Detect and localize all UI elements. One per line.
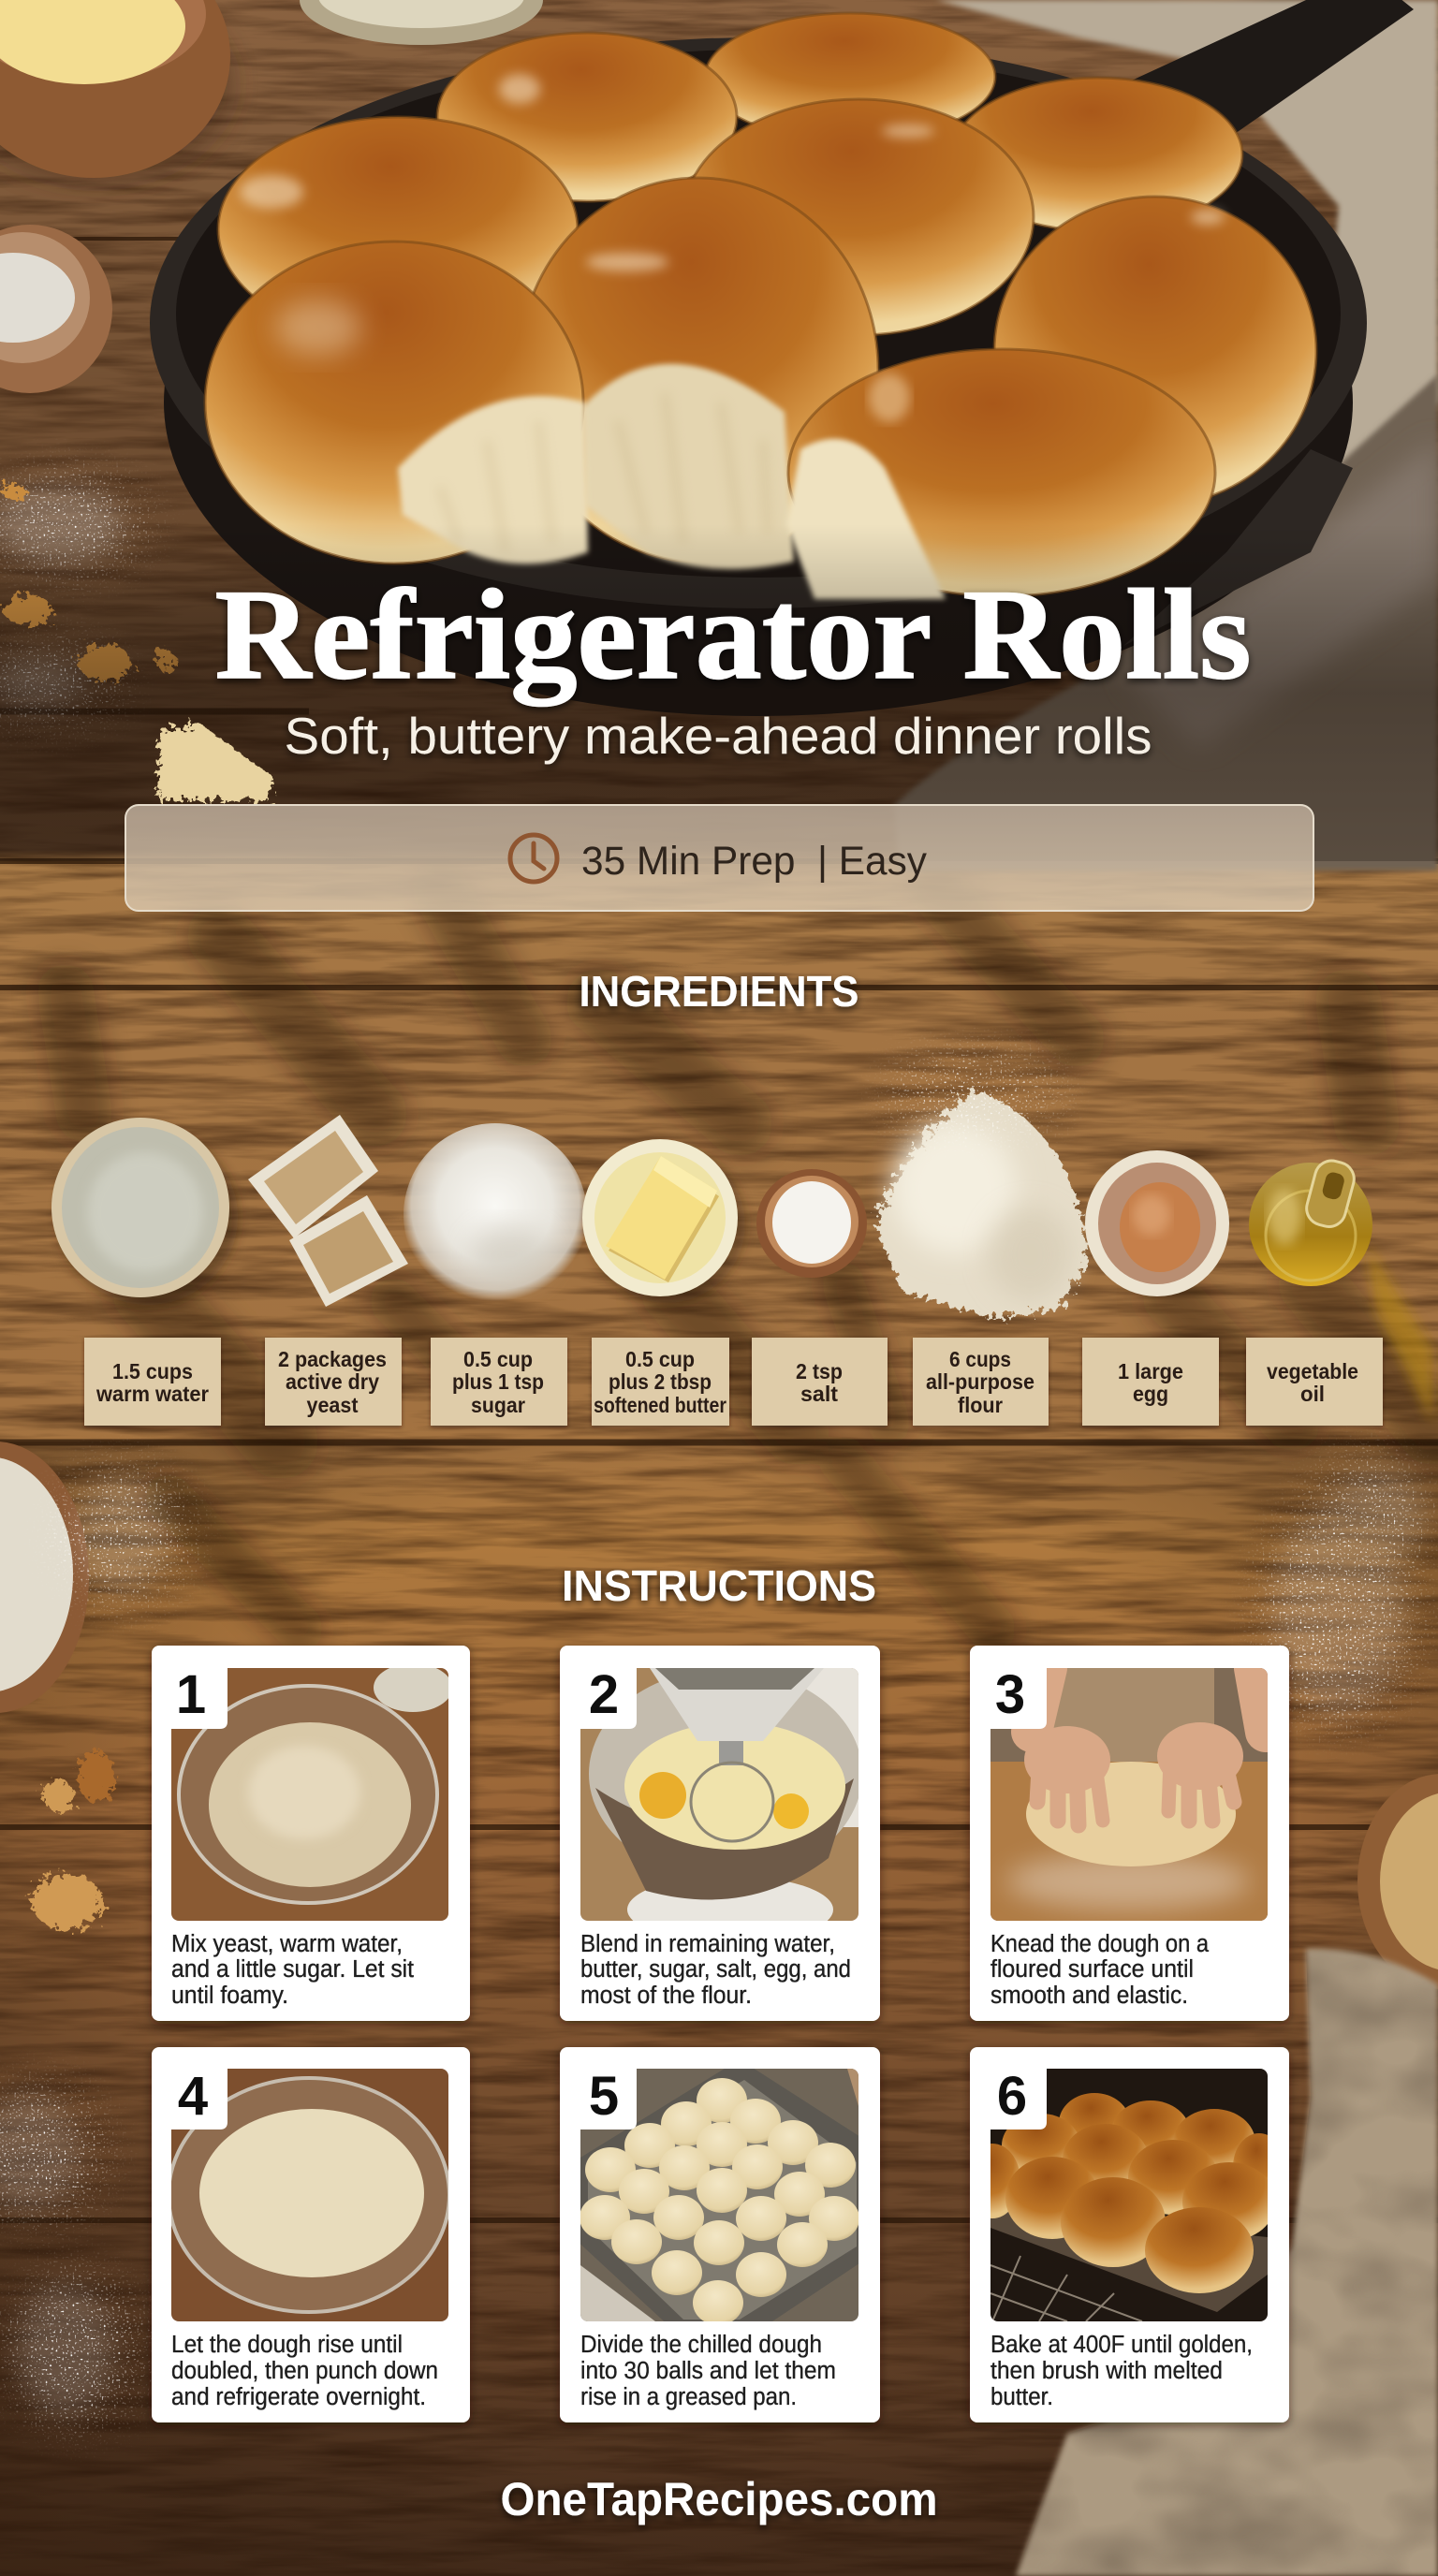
step 6 photo: golden rolls in oven bbox=[964, 2069, 1285, 2321]
step 6 text bbox=[990, 2332, 1253, 2410]
flour bowl, mid left bbox=[0, 1442, 89, 1713]
front roll, left bbox=[205, 242, 588, 564]
step 5 text bbox=[580, 2332, 836, 2410]
step 3 number tab bbox=[990, 1664, 1047, 1729]
step 4 text bbox=[171, 2332, 438, 2410]
step 4 text: Let the dough rise until bbox=[171, 2332, 403, 2358]
step 4 text: and refrigerate overnight. bbox=[171, 2384, 426, 2410]
step 5 text: rise in a greased pan. bbox=[580, 2384, 797, 2410]
step 2 number tab bbox=[580, 1664, 637, 1729]
step 4 card bbox=[152, 2047, 470, 2422]
title: Refrigerator Rolls bbox=[215, 563, 1251, 706]
step 6 number tab bbox=[990, 2066, 1047, 2130]
icon: clock bbox=[510, 835, 557, 882]
ingredient: yeast packets bbox=[248, 1115, 408, 1307]
label: yeast: 2 packages bbox=[278, 1347, 387, 1371]
label: water bbox=[84, 1338, 221, 1426]
label: salt: salt bbox=[800, 1382, 838, 1406]
label: sugar: 0.5 cup bbox=[463, 1347, 533, 1371]
step 1 text: Mix yeast, warm water, bbox=[171, 1931, 403, 1957]
label: yeast bbox=[265, 1338, 402, 1426]
ingredient: softened butter on plate bbox=[582, 1139, 745, 1303]
label: butter: plus 2 tbsp bbox=[609, 1369, 712, 1394]
label: sugar bbox=[431, 1338, 567, 1426]
step 5 number tab: 5 bbox=[589, 2066, 619, 2127]
label: butter: softened butter bbox=[594, 1393, 726, 1417]
label: butter bbox=[592, 1338, 729, 1426]
ingredient photos row bbox=[51, 1058, 1432, 1423]
label: egg: 1 large bbox=[1118, 1359, 1183, 1383]
step 2 text: most of the flour. bbox=[580, 1983, 752, 2009]
step 3 text: smooth and elastic. bbox=[990, 1983, 1188, 2009]
glass jar, top bbox=[300, 0, 543, 45]
website footer: OneTapRecipes.com bbox=[500, 2473, 938, 2525]
label: sugar: plus 1 tsp bbox=[452, 1369, 544, 1394]
butter highlights bbox=[240, 74, 1225, 271]
ingredient labels bbox=[84, 1338, 1383, 1426]
step 6 card bbox=[964, 2047, 1289, 2422]
label: yeast: yeast bbox=[307, 1393, 359, 1417]
darkening behind title bbox=[0, 524, 1438, 861]
dinner rolls in skillet bbox=[205, 13, 1316, 599]
flour bowl, left bbox=[0, 225, 112, 393]
linen towel, bottom right bbox=[1016, 1949, 1438, 2576]
label: butter: 0.5 cup bbox=[625, 1347, 695, 1371]
step 1 card bbox=[152, 1646, 470, 2021]
step 3 card bbox=[970, 1646, 1289, 2021]
step 5 photo: dough balls in greased pan bbox=[580, 2069, 858, 2321]
step 3 number tab: 3 bbox=[995, 1664, 1025, 1725]
step 1 text bbox=[171, 1931, 414, 2009]
step 2 number tab: 2 bbox=[589, 1664, 619, 1725]
step 6 text: butter. bbox=[990, 2384, 1053, 2410]
flour dust and crumbs, instructions area bbox=[0, 1460, 1423, 2424]
label: flour: all-purpose bbox=[926, 1369, 1034, 1394]
label: salt: 2 tsp bbox=[796, 1359, 843, 1383]
label: oil bbox=[1246, 1338, 1383, 1426]
step 3 text: floured surface until bbox=[990, 1956, 1194, 1983]
step 5 text: Divide the chilled dough bbox=[580, 2332, 822, 2358]
step 1 text: until foamy. bbox=[171, 1983, 288, 2009]
step 2 card bbox=[560, 1646, 880, 2021]
step 1 number tab: 1 bbox=[176, 1664, 206, 1725]
step 2 text: Blend in remaining water, bbox=[580, 1931, 835, 1957]
step 1 text: and a little sugar. Let sit bbox=[171, 1956, 414, 1983]
linen towel, top right bbox=[894, 0, 1438, 871]
label: sugar: sugar bbox=[471, 1393, 525, 1417]
ingredient: flour pile bbox=[875, 1058, 1086, 1318]
label: oil: vegetable bbox=[1267, 1359, 1358, 1383]
front roll, right bbox=[786, 349, 1215, 599]
step 1 photo: foamy yeast in glass bowl bbox=[171, 1663, 452, 1921]
back rolls bbox=[218, 13, 1316, 505]
subtitle: Soft, buttery make-ahead dinner rolls bbox=[285, 707, 1152, 765]
instructions heading: INSTRUCTIONS bbox=[562, 1561, 876, 1610]
cast iron skillet bbox=[150, 0, 1414, 716]
label: egg: egg bbox=[1133, 1382, 1168, 1406]
ingredient: egg on plate bbox=[1085, 1150, 1229, 1296]
step 3 text bbox=[990, 1931, 1210, 2009]
step 1 number tab bbox=[171, 1664, 227, 1729]
oat bowl, right edge bbox=[1357, 1774, 1438, 1989]
step 6 text: then brush with melted bbox=[990, 2358, 1223, 2384]
label: water: 1.5 cups bbox=[112, 1359, 193, 1383]
step 4 number tab bbox=[171, 2066, 227, 2130]
label: flour: flour bbox=[958, 1393, 1003, 1417]
step 2 text: butter, sugar, salt, egg, and bbox=[580, 1956, 851, 1983]
step 2 photo: stand mixer blending dough bbox=[580, 1668, 862, 1943]
ingredient: salt bowl bbox=[756, 1169, 867, 1278]
step 4 text: doubled, then punch down bbox=[171, 2358, 438, 2384]
label: egg bbox=[1082, 1338, 1219, 1426]
step 2 text bbox=[580, 1931, 851, 2009]
step 3 text: Knead the dough on a bbox=[990, 1931, 1210, 1957]
label: flour bbox=[913, 1338, 1049, 1426]
prep time and difficulty text: 35 Min Prep | Easy bbox=[581, 839, 927, 884]
label: flour: 6 cups bbox=[949, 1347, 1011, 1371]
label: salt bbox=[752, 1338, 888, 1426]
step 3 photo: hands kneading dough bbox=[990, 1668, 1268, 1921]
step 6 text: Bake at 400F until golden, bbox=[990, 2332, 1253, 2358]
ingredient: vegetable oil cruet bbox=[1249, 1157, 1432, 1423]
label: oil: oil bbox=[1300, 1382, 1325, 1406]
step 4 photo: risen dough in glass bowl bbox=[169, 2069, 449, 2321]
step 5 text: into 30 balls and let them bbox=[580, 2358, 836, 2384]
time and difficulty bar bbox=[125, 805, 1313, 911]
ingredient: sugar pile bbox=[404, 1123, 587, 1307]
front roll, middle bbox=[519, 178, 878, 569]
label: water: warm water bbox=[95, 1382, 209, 1406]
step 6 number tab: 6 bbox=[997, 2066, 1027, 2127]
step 5 card bbox=[560, 2047, 880, 2422]
ingredient: warm water bowl bbox=[51, 1118, 238, 1305]
bread crumb, lower left of hero bbox=[157, 723, 273, 800]
step 4 number tab: 4 bbox=[178, 2066, 208, 2127]
butter bowl, top left bbox=[0, 0, 232, 183]
flour dust and crumbs, hero bbox=[0, 477, 175, 721]
step 5 number tab bbox=[580, 2066, 637, 2130]
label: yeast: active dry bbox=[286, 1369, 379, 1394]
ingredients heading: INGREDIENTS bbox=[579, 967, 859, 1016]
